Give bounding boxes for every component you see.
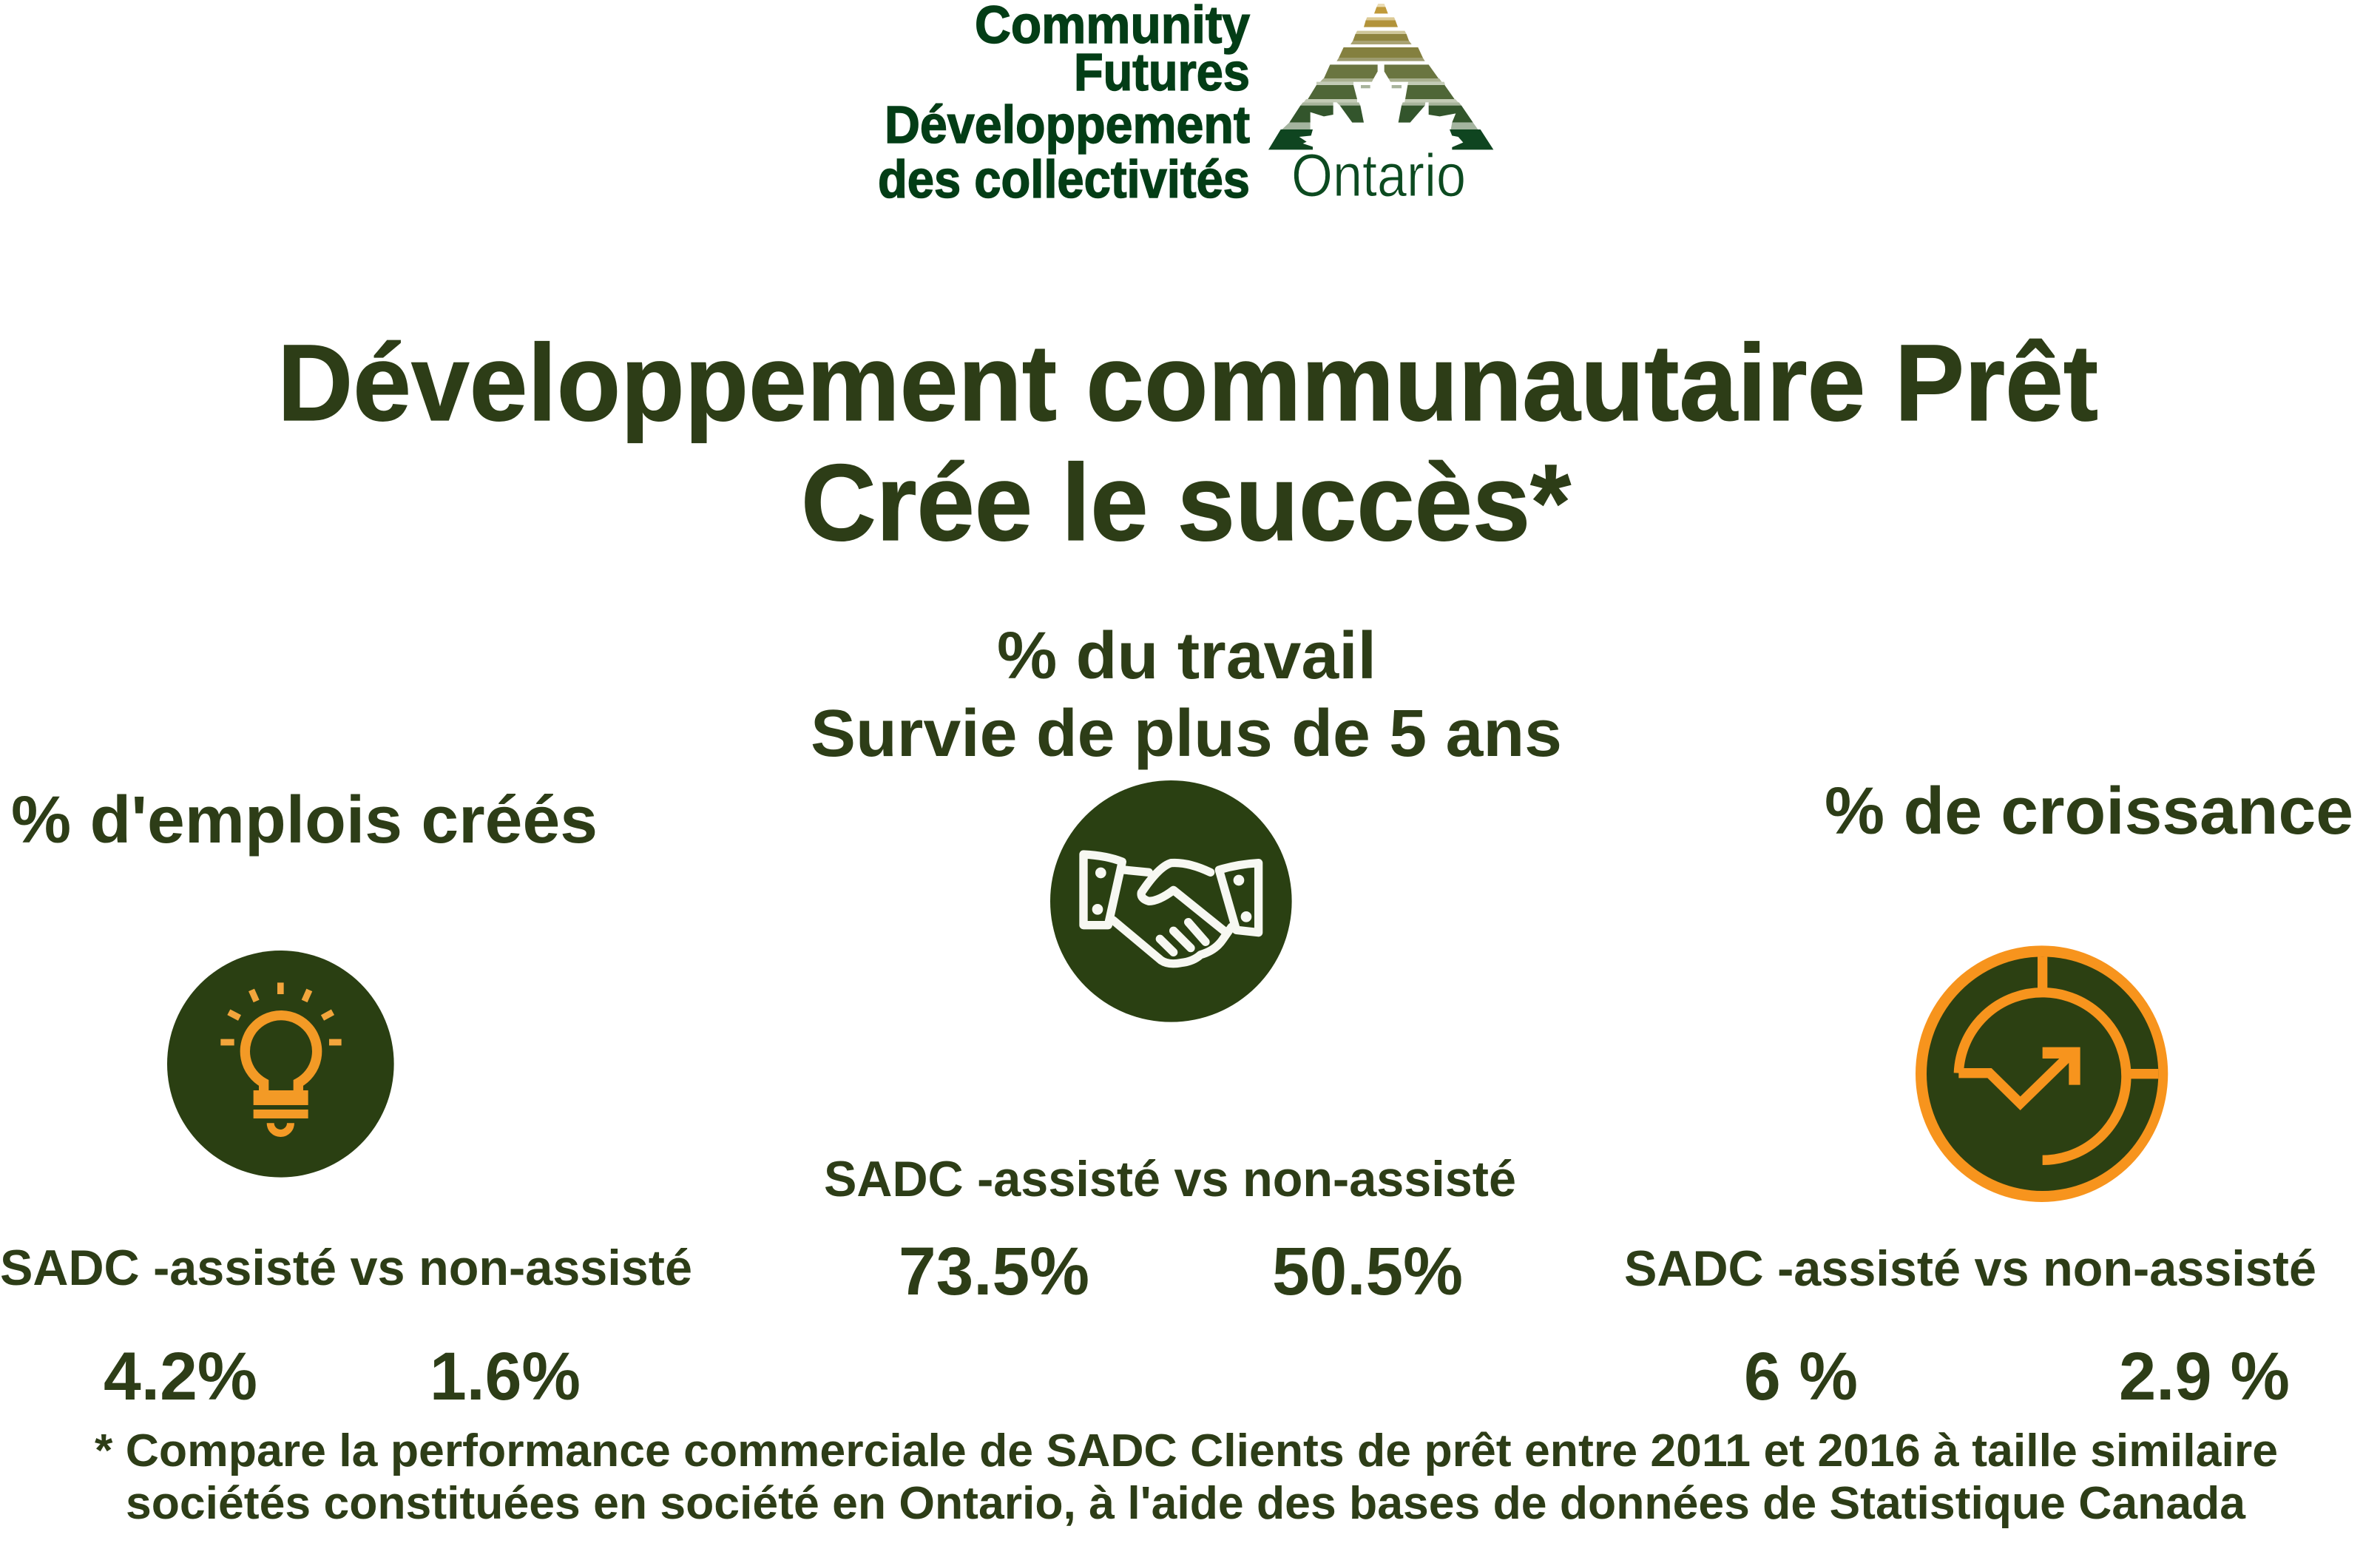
logo emblem: striped triangle with maple leaf	[1268, 4, 1493, 149]
panel: jobs created	[0, 783, 692, 1414]
label: assisted vs non-assisted: SADC -assisté vs non-assisté	[824, 1151, 1516, 1207]
label: assisted vs non-assisted: SADC -assisté vs non-assisté	[0, 1240, 692, 1296]
value: 6 %: 6 %	[1744, 1339, 1858, 1414]
panel: growth	[1624, 774, 2353, 1414]
value: 4.2%: 4.2%	[104, 1339, 257, 1414]
heading: job survival: Survie de plus de 5 ans	[811, 697, 1562, 771]
label: assisted vs non-assisted: SADC -assisté vs non-assisté	[1624, 1240, 2316, 1297]
value: 73.5%: 73.5%	[899, 1234, 1089, 1309]
footnote: sociétés constituées en société en Ontario, à l'aide des bases de données de Statistique Canada	[126, 1478, 2246, 1529]
logo wordmark: des collectivités	[878, 151, 1250, 209]
icon: light bulb	[167, 951, 394, 1178]
logo wordmark: Développement	[885, 96, 1250, 155]
heading: growth: % de croissance	[1825, 774, 2353, 848]
footnote: * Compare la performance commerciale de SADC Clients de prêt entre 2011 et 2016 à taille similaire	[95, 1425, 2278, 1476]
title	[277, 323, 2098, 564]
heading: jobs created: % d'emplois créés	[11, 783, 598, 857]
logo wordmark: Futures	[1074, 44, 1250, 102]
value: 2.9 %: 2.9 %	[2119, 1339, 2290, 1414]
panel: job survival	[811, 619, 1562, 1309]
icon: growth dial with arrow	[1916, 945, 2168, 1202]
logo: Community Futures Ontario	[878, 0, 1493, 209]
footnote	[95, 1425, 2278, 1529]
logo wordmark	[878, 0, 1250, 209]
heading: job survival: % du travail	[997, 619, 1376, 693]
title: Crée le succès*	[801, 442, 1572, 564]
icon: handshake	[1050, 780, 1292, 1022]
heading: job survival	[811, 619, 1562, 771]
value: 50.5%: 50.5%	[1272, 1234, 1463, 1309]
value: 1.6%: 1.6%	[430, 1339, 581, 1414]
logo text: Ontario: Ontario	[1291, 142, 1466, 209]
title: Développement communautaire Prêt	[277, 323, 2098, 444]
